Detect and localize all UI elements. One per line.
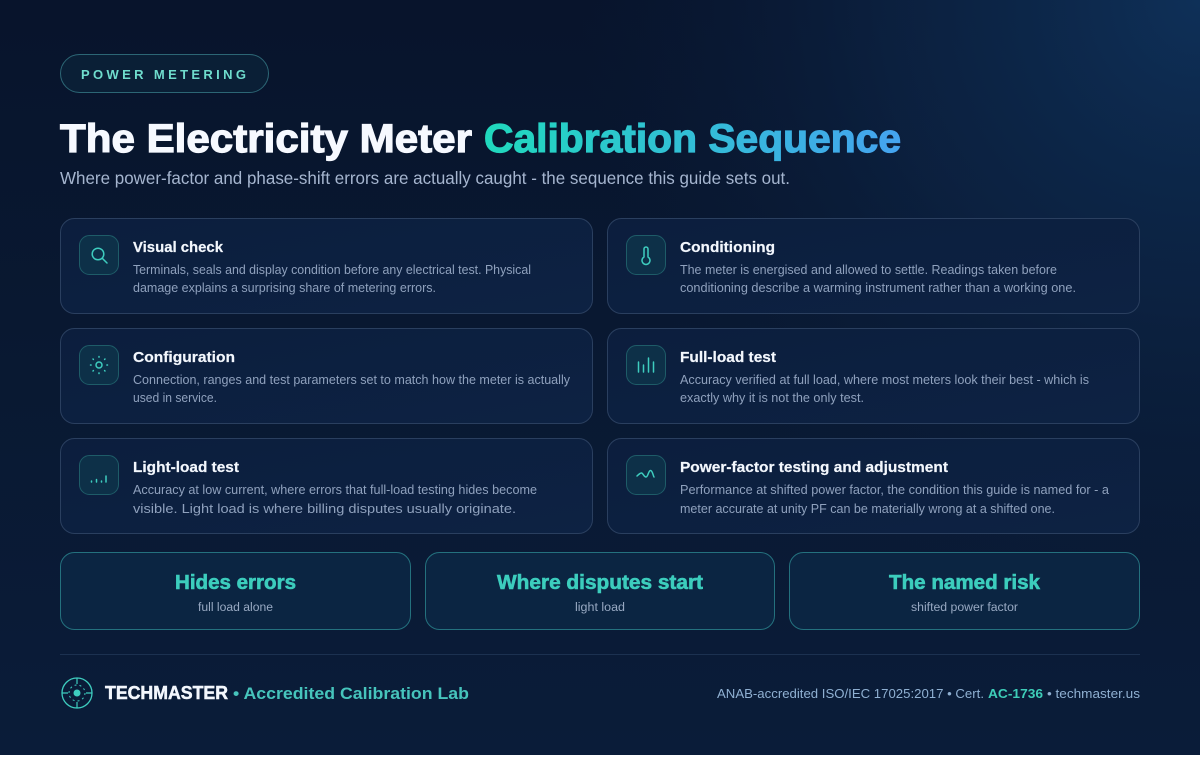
panel: full-load test — [608, 328, 1140, 424]
category pill: POWER METERING — [81, 67, 246, 82]
description: configuration — [133, 373, 571, 405]
heading: full-load test: Full-load test — [680, 349, 776, 366]
description: full-load test — [680, 373, 1089, 405]
icon: tall bars — [626, 346, 666, 384]
description: power-factor testing: Performance at shifted power factor, the condition this guide is named for - a — [680, 483, 1109, 497]
icon: techmaster logo — [62, 678, 92, 708]
category pill — [60, 54, 268, 92]
icon: short bars — [80, 456, 118, 494]
stat: hides errors: Hides errors — [175, 572, 296, 594]
icon: thermometer — [626, 236, 666, 274]
description: configuration: used in service. — [133, 391, 217, 405]
description: power-factor testing: meter accurate at unity PF can be materially wrong at a shifted one. — [680, 502, 1055, 516]
heading: configuration: Configuration — [133, 349, 235, 366]
icon: gear — [80, 346, 118, 384]
icon: sine wave — [626, 456, 666, 494]
stat: hides errors — [60, 552, 410, 630]
description: visual check: Terminals, seals and display condition before any electrical test. Physical — [133, 263, 531, 277]
heading: power-factor testing: Power-factor testing and adjustment — [680, 459, 948, 476]
description: conditioning — [680, 263, 1076, 295]
description: power-factor testing — [680, 483, 1109, 516]
description: conditioning: conditioning describe a warming instrument rather than a working one. — [680, 281, 1076, 295]
stat: where disputes start — [426, 552, 774, 630]
description: configuration: Connection, ranges and test parameters set to match how the meter is actually — [133, 373, 571, 387]
footer accreditation: • techmaster.us — [1047, 686, 1141, 701]
icon: magnifier — [80, 236, 118, 274]
stat: the named risk — [790, 552, 1140, 630]
title: Calibration Sequence — [484, 117, 901, 161]
description: light-load test — [133, 483, 537, 516]
footer brand: TECHMASTER — [105, 683, 228, 703]
stat: the named risk: The named risk — [889, 572, 1041, 594]
panel: configuration — [60, 328, 592, 424]
description: light-load test: visible. Light load is where billing disputes usually originate. — [133, 502, 516, 516]
description: full-load test: Accuracy verified at full load, where most meters look their best - which is — [680, 373, 1089, 387]
stat: the named risk: shifted power factor — [911, 602, 1018, 614]
heading: light-load test: Light-load test — [133, 459, 239, 476]
title — [60, 117, 901, 161]
panel: visual check — [60, 218, 592, 314]
heading: visual check: Visual check — [133, 239, 224, 256]
stat: where disputes start: Where disputes start — [497, 572, 703, 594]
subtitle: Where power-factor and phase-shift errors are actually caught - the sequence this guide sets out. — [60, 168, 790, 188]
heading: conditioning: Conditioning — [680, 239, 775, 256]
footer accreditation: ANAB-accredited ISO/IEC 17025:2017 • Cert. — [717, 686, 984, 701]
panel: conditioning — [608, 218, 1140, 314]
footer brand — [62, 678, 469, 708]
description: full-load test: exactly why it is not the only test. — [680, 391, 864, 405]
footer brand: • Accredited Calibration Lab — [233, 684, 469, 703]
description: conditioning: The meter is energised and allowed to settle. Readings taken before — [680, 263, 1057, 277]
panel: power-factor testing — [608, 438, 1140, 534]
description: light-load test: Accuracy at low current, where errors that full-load testing hides become — [133, 483, 537, 497]
footer accreditation — [717, 686, 1141, 701]
panel: light-load test — [60, 438, 592, 534]
title: The Electricity Meter — [60, 117, 472, 161]
stat: hides errors: full load alone — [198, 602, 273, 614]
description: visual check: damage explains a surprising share of metering errors. — [133, 281, 436, 295]
footer accreditation: AC-1736 — [988, 686, 1043, 701]
description: visual check — [133, 263, 531, 295]
stat: where disputes start: light load — [575, 602, 625, 614]
